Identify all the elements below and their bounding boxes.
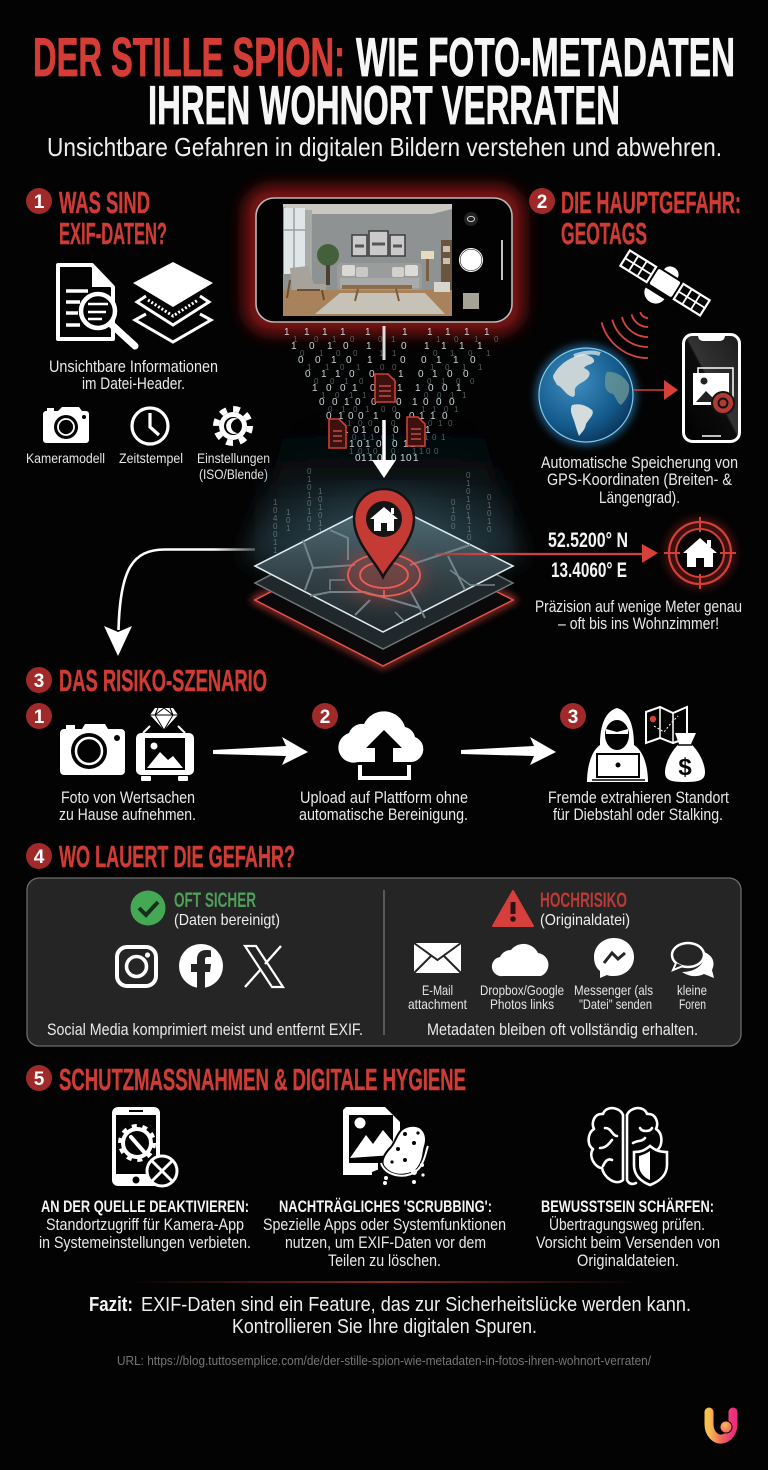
- binary stream: 01100101: [355, 453, 419, 464]
- binary stream: 10100110: [349, 439, 425, 450]
- text: Foto von Wertsachen: [61, 789, 195, 807]
- text: invisible information: im Datei-Header.: [82, 375, 185, 393]
- stream backdrop: [248, 380, 520, 605]
- channel labels: "Datei" senden: [579, 996, 652, 1012]
- labels: metadata kinds: [26, 450, 270, 482]
- dim stream: 1101001011: [307, 363, 483, 372]
- measure 2: [263, 1107, 506, 1270]
- panel: section 5 protective measures: [26, 1062, 720, 1270]
- icon: globe: [535, 344, 637, 446]
- binary stream: 1010101111: [291, 341, 483, 352]
- text: automatic storage: GPS-Koordinaten (Breiten- &: [547, 471, 732, 489]
- side digits: [273, 467, 492, 555]
- binary stream: 0100100110: [326, 411, 448, 422]
- icon: data layers: [133, 262, 213, 342]
- side digits: 1040011: [273, 498, 278, 555]
- icon: X: [245, 946, 283, 987]
- arrow: down through stream: [372, 326, 396, 478]
- text: Fremde extrahieren Standort: [548, 789, 729, 807]
- text: [299, 789, 468, 824]
- text: NACHTRÄGLICHES 'SCRUBBING':: [279, 1198, 492, 1216]
- arrow: globe to phone: [633, 380, 678, 400]
- binary stream: [273, 327, 499, 555]
- channel labels: kleine: [677, 982, 707, 998]
- text: Originaldateien.: [577, 1252, 679, 1270]
- text: zu Hause aufnehmen.: [59, 806, 196, 824]
- icon: money bag: $: [678, 754, 692, 781]
- text: Übertragungsweg prüfen.: [549, 1216, 705, 1234]
- source URL: URL: https://blog.tuttosemplice.com/de/der-stille-spion-wie-metadaten-in-fotos-ihren-wohnort-verraten/: [117, 1354, 651, 1368]
- side digits: 101011: [318, 487, 323, 536]
- channel labels: Dropbox/Google: [480, 982, 564, 998]
- text: Social Media komprimiert meist und entfernt EXIF.: [47, 1021, 363, 1039]
- step 1: [26, 703, 196, 824]
- step 2: [299, 703, 468, 824]
- icon: hacker: [587, 708, 648, 782]
- icon: facebook: [179, 944, 223, 988]
- text: automatic storage: [541, 454, 738, 507]
- text: Vorsicht beim Versenden von: [536, 1234, 720, 1252]
- arrow: step 1 to 2: [213, 737, 308, 765]
- icon: phone with geotagged photo: [684, 334, 740, 442]
- binary stream: 0010100110: [298, 355, 476, 366]
- card: [27, 878, 741, 1046]
- text: Spezielle Apps oder Systemfunktionen: [263, 1216, 506, 1234]
- binary stream: 10100011: [343, 425, 431, 436]
- icon: settings gear: [216, 409, 250, 443]
- text: [536, 1198, 720, 1270]
- icon: scrub image: [343, 1107, 428, 1185]
- icon: envelope: [414, 943, 461, 973]
- labels: metadata kinds: Zeitstempel: [119, 450, 183, 466]
- heading: section 4: [26, 839, 295, 874]
- icon: brain and shield: [589, 1108, 667, 1185]
- channel labels: Messenger (als: [574, 982, 653, 998]
- icon: framed valuables: [136, 708, 194, 781]
- binary stream: 0110010100: [305, 369, 469, 380]
- icon: satellite: [612, 243, 714, 328]
- coordinates: [548, 529, 628, 582]
- coordinates: 52.5200° N: [548, 529, 628, 552]
- text: AN DER QUELLE DEAKTIVIEREN:: [41, 1198, 249, 1216]
- dim stream: 1010011010: [293, 335, 499, 344]
- label: high risk: [540, 889, 630, 929]
- panel: central illustration: [104, 186, 742, 666]
- icon: speech bubbles: [672, 943, 714, 978]
- dim stream: 0010110100: [314, 377, 475, 386]
- labels: metadata kinds: Einstellungen: [197, 450, 270, 466]
- binary stream: 1001011001: [312, 383, 462, 394]
- label: often safe: [174, 889, 280, 929]
- heading: section 2: 2: [537, 192, 547, 213]
- text: automatische Bereinigung.: [299, 806, 468, 824]
- icons: red documents: [329, 374, 425, 448]
- target rings: [341, 549, 425, 601]
- text: für Diebstahl oder Stalking.: [553, 806, 723, 824]
- arrow: step 2 to 3: [461, 737, 556, 765]
- label: high risk: (Originaldatei): [540, 912, 630, 929]
- map roads: [303, 530, 495, 622]
- channel labels: E-Mail: [422, 982, 453, 998]
- icon: instagram: [117, 947, 156, 986]
- dim stream: 1100101010: [335, 419, 453, 428]
- text: nutzen, um EXIF-Daten vor dem: [285, 1234, 486, 1252]
- column: often safe: [47, 889, 363, 1039]
- heading: section 1: EXIF-DATEN?: [59, 216, 167, 251]
- text: precision: [535, 598, 742, 633]
- icon: cloud upload: [338, 711, 423, 778]
- side digits: 110: [467, 517, 472, 542]
- heading: section 1: 1: [34, 192, 45, 213]
- icon: signal waves: [602, 312, 648, 358]
- arrow: to left, down to step 3: [104, 550, 255, 656]
- icon: clock: [132, 408, 168, 444]
- icon: phone settings blocked: [112, 1107, 177, 1186]
- panel: section 2 geotags: [529, 185, 741, 507]
- measure 3: [536, 1108, 720, 1270]
- side digits: 01010: [487, 493, 492, 534]
- title: DER STILLE SPION:: [33, 26, 345, 88]
- icon: money bag: [665, 733, 705, 782]
- arrow: to coordinates: [435, 544, 658, 563]
- channel labels: [408, 982, 707, 1012]
- dim stream: 0011010101: [342, 433, 446, 442]
- label: often safe: OFT SICHER: [174, 889, 256, 912]
- icon: messenger: [594, 938, 634, 978]
- text: invisible information: Unsichtbare Informationen: [49, 358, 218, 376]
- labels: metadata kinds: Kameramodell: [26, 450, 105, 466]
- conclusion: [89, 1294, 691, 1338]
- binary stream: 1111111111: [284, 327, 490, 338]
- icon: camera: [60, 724, 125, 775]
- divider: [383, 890, 385, 1035]
- text: [39, 1198, 251, 1252]
- location pin: [354, 489, 414, 577]
- coordinates: 13.4060° E: [551, 559, 627, 582]
- text: Upload auf Plattform ohne: [300, 789, 468, 807]
- dim stream: 1010101100: [349, 447, 439, 456]
- channel labels: attachment: [408, 996, 467, 1012]
- icon: warning: [493, 891, 533, 926]
- photo: living room: [283, 204, 452, 316]
- title: [33, 26, 735, 136]
- panel: section 4 where danger lurks: [26, 839, 741, 1046]
- binary stream: 0010001000: [319, 397, 455, 408]
- column: high risk: [408, 889, 714, 1039]
- map layers: [255, 501, 513, 666]
- heading: section 1: [26, 185, 167, 251]
- step 1: 1: [34, 707, 45, 728]
- dim stream: 1011010011: [321, 391, 467, 400]
- conclusion: Kontrollieren Sie Ihre digitalen Spuren.: [232, 1316, 537, 1338]
- labels: metadata kinds: (ISO/Blende): [199, 466, 268, 482]
- heading: section 5: [26, 1062, 466, 1097]
- icon: document with magnifier: [58, 265, 135, 346]
- text: Standortzugriff für Kamera-App: [46, 1216, 244, 1234]
- label: often safe: (Daten bereinigt): [174, 912, 280, 929]
- text: [263, 1198, 506, 1270]
- icon: cloud: [492, 944, 548, 976]
- text: [548, 789, 729, 824]
- text: precision: – oft bis ins Wohnzimmer!: [558, 615, 719, 633]
- channel labels: Photos links: [490, 996, 554, 1012]
- phone camera: [244, 186, 524, 334]
- text: [59, 789, 196, 824]
- side digits: 101: [286, 508, 291, 533]
- heading: section 3: [26, 663, 267, 698]
- step 3: 3: [568, 707, 578, 728]
- heading: section 3: DAS RISIKO-SZENARIO: [59, 663, 267, 698]
- text: invisible information: [49, 358, 218, 393]
- side digits: 0100: [451, 498, 456, 531]
- heading: section 3: 3: [34, 671, 44, 692]
- text: in Systemeinstellungen verbieten.: [39, 1234, 251, 1252]
- panel: section 1 EXIF: [26, 185, 270, 482]
- dim stream: 0100110101: [300, 349, 491, 358]
- icon: check: [130, 890, 166, 926]
- logo: [709, 1412, 733, 1439]
- heading: section 2: GEOTAGS: [561, 216, 647, 251]
- step 2: 2: [320, 707, 330, 728]
- dim stream: 0101001101: [328, 405, 459, 414]
- side digits: 010101: [466, 471, 471, 520]
- text: Teilen zu löschen.: [328, 1252, 441, 1270]
- heading: section 1: WAS SIND: [59, 185, 150, 220]
- heading: section 5: 5: [34, 1069, 45, 1090]
- text: BEWUSSTSEIN SCHÄRFEN:: [541, 1198, 714, 1216]
- channel labels: Foren: [679, 996, 706, 1012]
- heading: section 5: SCHUTZMASSNAHMEN & DIGITALE HYGIENE: [59, 1062, 466, 1097]
- text: Metadaten bleiben oft vollständig erhalten.: [427, 1021, 698, 1039]
- text: automatic storage: Automatische Speicherung von: [541, 454, 738, 472]
- label: high risk: HOCHRISIKO: [540, 889, 627, 912]
- conclusion: Fazit:: [89, 1294, 133, 1316]
- icon: map: [646, 707, 687, 743]
- side digits: 01010101: [307, 467, 312, 532]
- heading: section 2: [529, 185, 741, 251]
- heading: section 4: 4: [34, 847, 45, 868]
- step 3: [548, 703, 729, 824]
- measure 1: [39, 1107, 251, 1252]
- dim stream: [293, 335, 499, 456]
- text: automatic storage: Längengrad).: [599, 489, 680, 507]
- icon: camera: [43, 407, 89, 443]
- heading: section 4: WO LAUERT DIE GEFAHR?: [59, 839, 295, 874]
- icon: target house: [664, 517, 736, 589]
- panel: section 3 scenario: [26, 663, 729, 824]
- conclusion: EXIF-Daten sind ein Feature, das zur Sicherheitslücke werden kann.: [141, 1294, 691, 1316]
